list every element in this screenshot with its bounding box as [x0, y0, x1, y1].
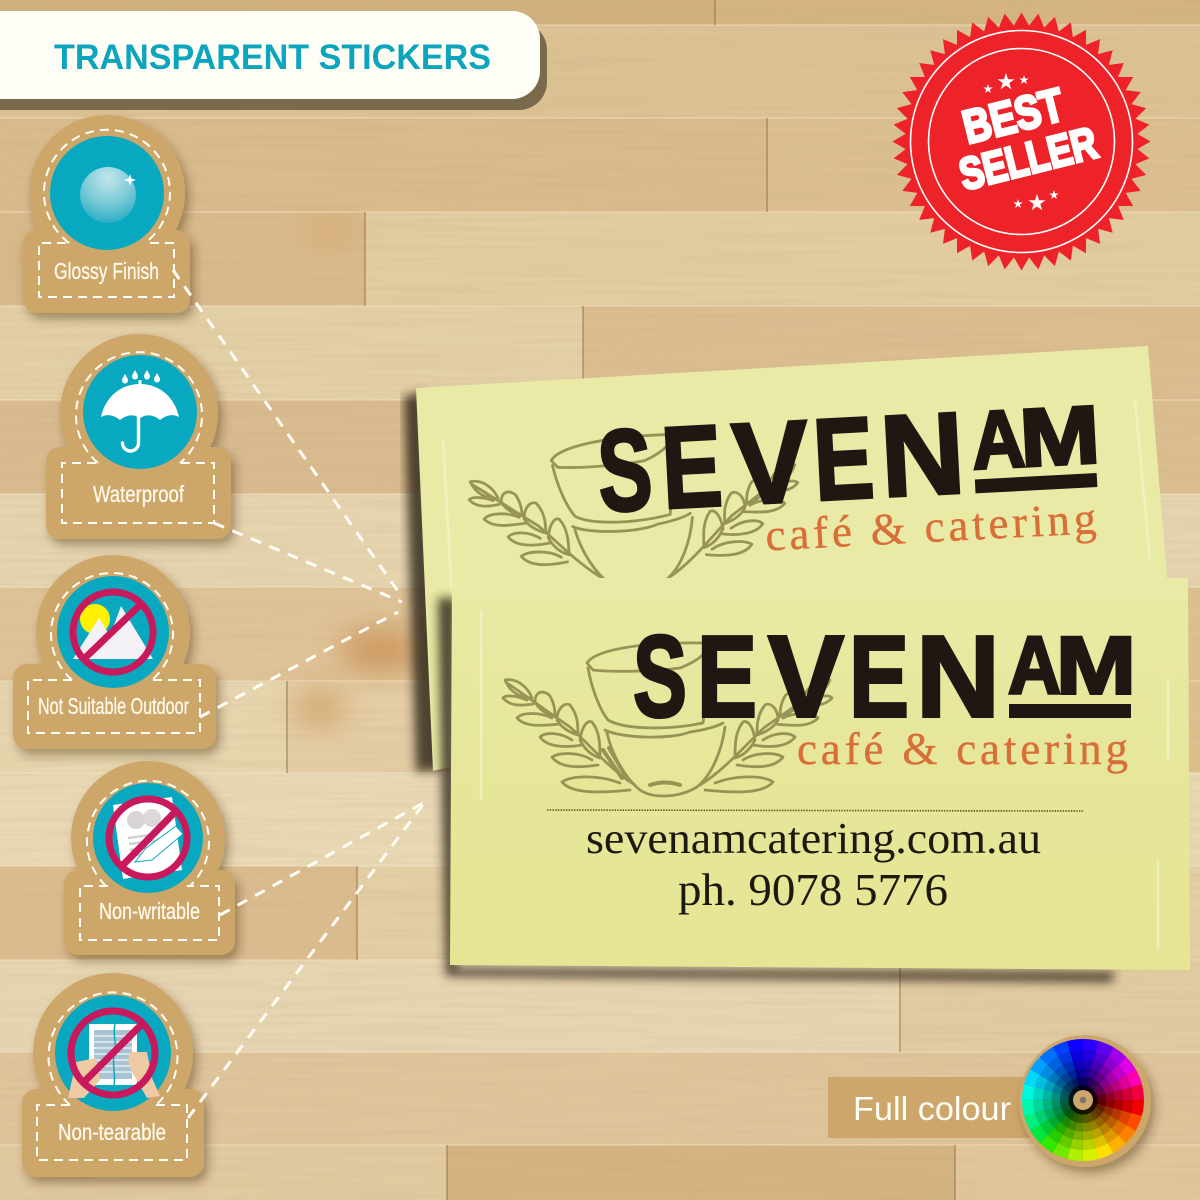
logo wordmark: E — [697, 612, 757, 742]
seal text: BEST — [957, 77, 1069, 154]
back sticker logo: V — [729, 396, 812, 530]
full colour text: Full colour — [853, 1090, 1011, 1127]
badge: waterproof — [46, 334, 231, 539]
badge: non-writable — [64, 761, 235, 955]
back sticker — [416, 346, 1168, 771]
website: sevenamcatering.com.au — [586, 814, 1041, 863]
label: waterproof: Waterproof — [93, 481, 184, 507]
connector lines — [173, 270, 425, 1118]
back sticker logo — [465, 380, 1106, 598]
badge: glossy finish — [23, 115, 190, 313]
logo AM: A — [1008, 620, 1061, 712]
logo wordmark: S — [633, 612, 687, 742]
seal text — [954, 77, 1102, 200]
back sticker logo: E — [658, 400, 725, 533]
back sticker shadow — [404, 392, 444, 772]
icon: colour wheel — [1022, 1039, 1144, 1161]
icon: umbrella — [101, 370, 179, 451]
logo AM: M — [1056, 620, 1136, 712]
coffee cup illustration — [503, 643, 832, 796]
dotted divider — [547, 810, 1083, 811]
logo wordmark — [633, 612, 1000, 742]
title text: TRANSPARENT STICKERS — [54, 38, 491, 77]
front sticker — [450, 578, 1190, 970]
icon: glossy bead — [80, 167, 136, 223]
colour wheel disc — [1019, 1035, 1151, 1167]
back sticker logo: café & catering — [764, 493, 1097, 560]
title banner — [0, 11, 547, 110]
badge: non-tearable — [22, 973, 204, 1177]
back sticker logo: S — [594, 404, 655, 537]
label: glossy finish: Glossy Finish — [54, 258, 159, 284]
logo wordmark: N — [916, 612, 1000, 742]
icon: no mountains — [73, 592, 153, 672]
back sticker logo: E — [810, 392, 877, 525]
full colour label — [828, 1077, 1038, 1138]
back sticker logo: A — [969, 393, 1027, 487]
icon: no writing — [109, 797, 187, 879]
icon: no tearing — [68, 1011, 160, 1098]
back sticker logo: M — [1017, 389, 1102, 484]
phone: ph. 9078 5776 — [678, 864, 948, 915]
back sticker logo: N — [877, 388, 968, 522]
logo AM — [1008, 620, 1136, 718]
badge: not suitable outdoor — [13, 555, 216, 749]
logo wordmark: V — [768, 612, 844, 742]
seal text: SELLER — [954, 117, 1102, 200]
logo wordmark: E — [849, 612, 909, 742]
label: non-tearable: Non-tearable — [58, 1119, 166, 1145]
seal stars — [983, 73, 1059, 210]
best seller seal — [872, 0, 1171, 291]
front sticker shadow — [438, 598, 1115, 982]
label: not suitable outdoor: Not Suitable Outdoor — [38, 693, 189, 719]
label: non-writable: Non-writable — [99, 898, 200, 924]
cafe tagline: café & catering — [797, 724, 1128, 774]
